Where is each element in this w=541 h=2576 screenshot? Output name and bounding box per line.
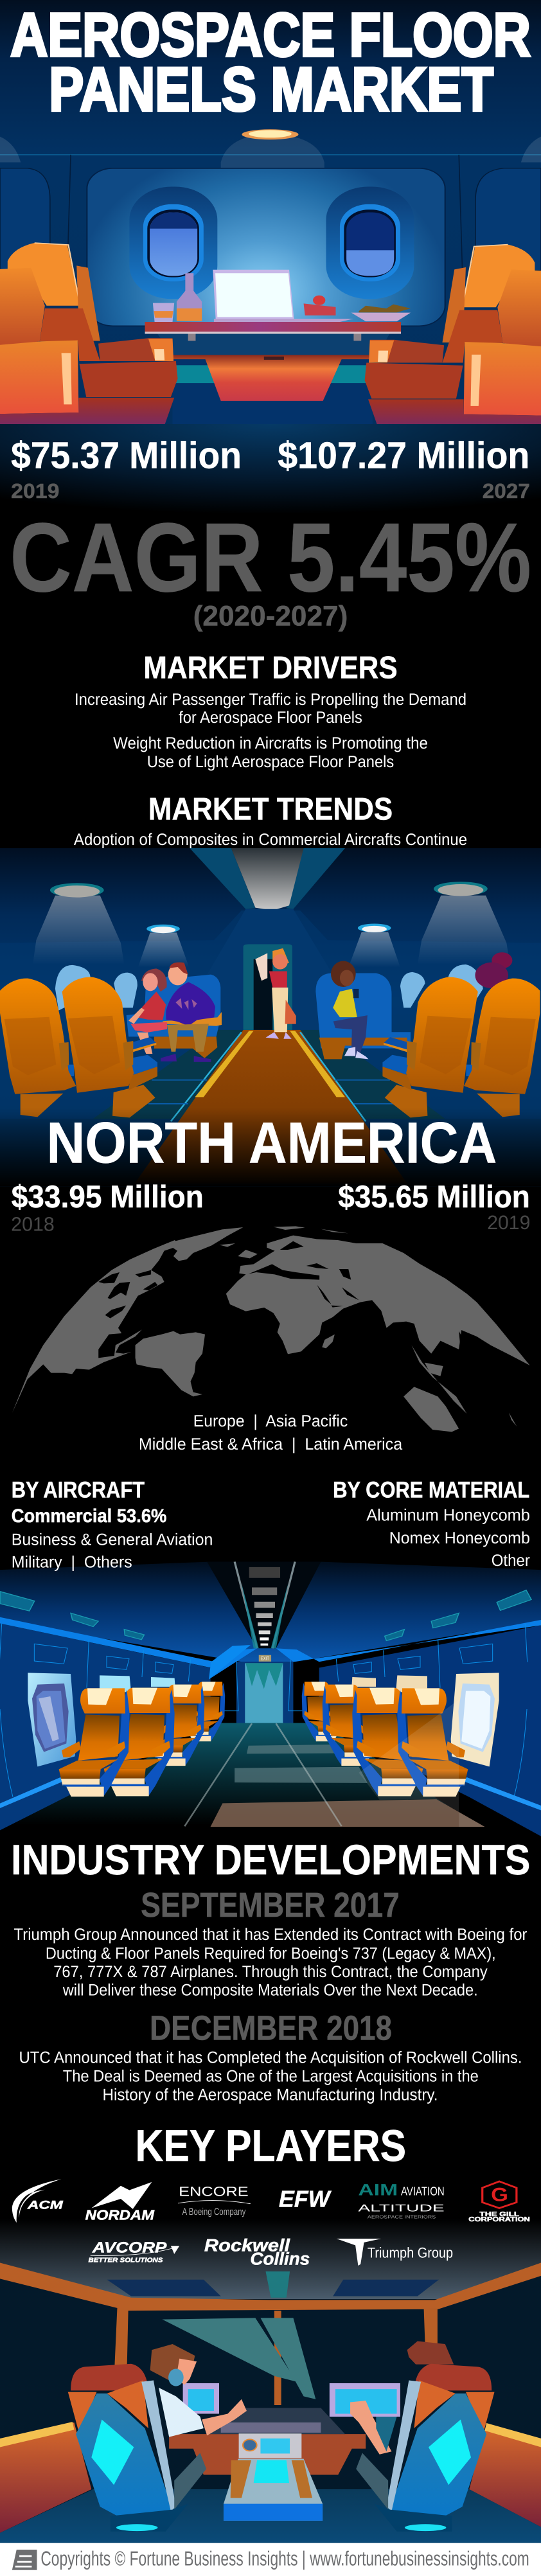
right seat [365, 245, 541, 426]
icon: glass [153, 303, 174, 322]
seat rows left [59, 1682, 225, 1797]
market drivers: Use of Light Aerospace Floor Panels [147, 752, 394, 770]
seat 4 [186, 1682, 225, 1741]
seat rows right [302, 1682, 468, 1797]
icon: right window [326, 186, 414, 299]
window frame [0, 2262, 541, 2405]
seat 2 [104, 1688, 175, 1796]
wall trim strips [0, 1777, 541, 1810]
flight attendant [255, 948, 296, 1039]
logo: Rockwell Collins [204, 2235, 310, 2269]
segment: by aircraft [12, 1477, 213, 1571]
pilot seat right [356, 2364, 495, 2532]
side console right [469, 2423, 541, 2527]
other regions [139, 1412, 402, 1453]
purple haired passenger [475, 952, 512, 988]
logo: Encore: ENCORE [179, 2184, 249, 2199]
pilot left [150, 2344, 247, 2437]
woman with phone [331, 961, 369, 1059]
logo: Gill Corporation: G [491, 2184, 508, 2205]
development: December 2018: DECEMBER 2018 [150, 2009, 392, 2047]
blue seats right [315, 973, 411, 1059]
segment: by aircraft: Commercial 53.6% [12, 1505, 166, 1526]
wall panel [87, 168, 445, 326]
logo: ACM [12, 2179, 64, 2223]
far windows left [100, 1675, 175, 1692]
seas and lakes [98, 1241, 477, 1349]
other regions: Middle East & Africa | Latin America [139, 1435, 402, 1453]
logo: Rockwell Collins: Collins [250, 2249, 310, 2269]
illustration: business cabin [0, 0, 541, 426]
market size 2027 [278, 434, 530, 502]
floor and aisle [93, 1030, 445, 1184]
section: segments text [139, 1412, 402, 1453]
market size 2019: $75.37 Million [11, 434, 242, 476]
lights [33, 882, 510, 967]
icon: Fortune Business Insights logo [12, 2550, 37, 2570]
North America 2018 [11, 1179, 204, 1235]
orange front seats right [382, 977, 540, 1117]
logo: AIM Altitude: AIM [358, 2181, 398, 2199]
logo: Avcorp: BETTER SOLUTIONS [88, 2257, 163, 2264]
segment: by core material [333, 1477, 530, 1569]
window glare [162, 2318, 315, 2399]
pilot seat left [68, 2364, 206, 2532]
icon: plate [351, 305, 411, 321]
segment: by aircraft: Business & General Aviation [12, 1530, 213, 1549]
cabin ceiling, walls and floor [0, 1561, 541, 1854]
wall panels left [0, 1624, 238, 1797]
sunlight on right seats [359, 1700, 484, 1827]
far windows right [351, 1675, 427, 1692]
logo: Gill Corporation [468, 2181, 530, 2223]
cabin side details [0, 1624, 541, 1810]
logo: Gill Corporation: CORPORATION [468, 2216, 530, 2223]
section: market size and CAGR [0, 424, 541, 849]
right window [451, 1673, 499, 1766]
market trends [74, 791, 467, 849]
illustration: passenger cabin [0, 848, 541, 1186]
pilot right [350, 2341, 454, 2455]
icon: bottle [177, 273, 202, 321]
illustration: cabin aisle view [0, 1561, 541, 1854]
icon: ceiling light [242, 129, 299, 139]
development: September 2017 [13, 1886, 528, 1999]
logo: Nordam [85, 2182, 155, 2223]
section: hero cabin and title [0, 0, 541, 426]
logo: Avcorp: AVCORP [92, 2239, 167, 2256]
far windows [55, 964, 483, 1011]
CAGR: (2020-2027) [193, 600, 348, 632]
orange front seats left [0, 977, 157, 1117]
logo: AIM Altitude [358, 2181, 445, 2219]
left seat [0, 243, 178, 424]
market drivers: Weight Reduction in Aircrafts is Promoting the [113, 734, 428, 752]
heading: key players: KEY PLAYERS [136, 2120, 406, 2171]
icon: left window [129, 186, 217, 299]
icon: laptop [213, 270, 353, 322]
title [10, 1, 531, 123]
illustration: cockpit [0, 2219, 541, 2543]
market size 2019: 2019 [11, 479, 59, 502]
segment: by aircraft: BY AIRCRAFT [12, 1477, 145, 1502]
icon: cake [304, 296, 336, 315]
market size 2027: 2027 [483, 479, 530, 502]
section: passenger cabin and North America [0, 848, 541, 1235]
development: September 2017: SEPTEMBER 2017 [141, 1886, 400, 1924]
seat 1 [59, 1688, 130, 1797]
seat 3 [152, 1685, 204, 1766]
door [244, 944, 292, 1030]
bright trims [0, 1617, 541, 1680]
wall panels right [288, 1624, 528, 1797]
footer [0, 2543, 541, 2576]
other regions: Europe | Asia Pacific [193, 1412, 348, 1430]
section: key players and cockpit [0, 2120, 541, 2576]
section: segments [12, 1477, 530, 1571]
North America 2018: $33.95 Million [12, 1179, 204, 1214]
market trends: MARKET TRENDS [148, 791, 393, 826]
North America 2019 [338, 1179, 530, 1234]
logo: AIM Altitude: AVIATION [401, 2184, 445, 2198]
rear door: EXIT [261, 1656, 269, 1661]
fade to black [0, 1108, 541, 1186]
market size 2019 [11, 434, 242, 502]
logo: AIM Altitude: AEROSPACE INTERIORS [368, 2214, 436, 2219]
ceiling lights [249, 1567, 280, 1646]
logo: Triumph Group: Triumph Group [368, 2244, 453, 2261]
development: December 2018 [19, 2009, 522, 2104]
logo: AIM Altitude: ALTITUDE [358, 2203, 445, 2214]
left seat row and couple [127, 963, 222, 1062]
instrument panel [169, 2383, 400, 2521]
globe map [12, 1226, 530, 1432]
logo: Nordam: NORDAM [85, 2208, 155, 2223]
table with laptop and drinks [145, 270, 411, 355]
logo: Avcorp [88, 2239, 179, 2264]
market drivers [75, 650, 466, 770]
floor [0, 2489, 541, 2543]
market drivers: for Aerospace Floor Panels [179, 708, 362, 727]
logo: Rockwell Collins: Rockwell [204, 2235, 290, 2255]
floor and carpet [172, 355, 373, 424]
logo: Gill Corporation: THE GILL [479, 2210, 519, 2217]
market drivers: MARKET DRIVERS [143, 650, 398, 685]
aisle floor [0, 1723, 541, 1854]
side console left [0, 2422, 91, 2533]
logo: Triumph Group [337, 2239, 453, 2266]
blue glow [0, 424, 541, 524]
logo: EFW: EFW [279, 2186, 332, 2212]
logo: Encore: A Boeing Company [182, 2206, 245, 2217]
couple passengers [129, 963, 215, 1062]
rear door [236, 1655, 293, 1724]
left window [28, 1673, 76, 1766]
logo: ACM: ACM [27, 2199, 64, 2211]
section: industry developments [11, 1836, 530, 2104]
North America 2018: 2018 [11, 1213, 55, 1235]
logo: Encore [178, 2184, 251, 2217]
blue seats left [127, 975, 222, 1058]
segment: by aircraft: Military | Others [12, 1553, 132, 1571]
